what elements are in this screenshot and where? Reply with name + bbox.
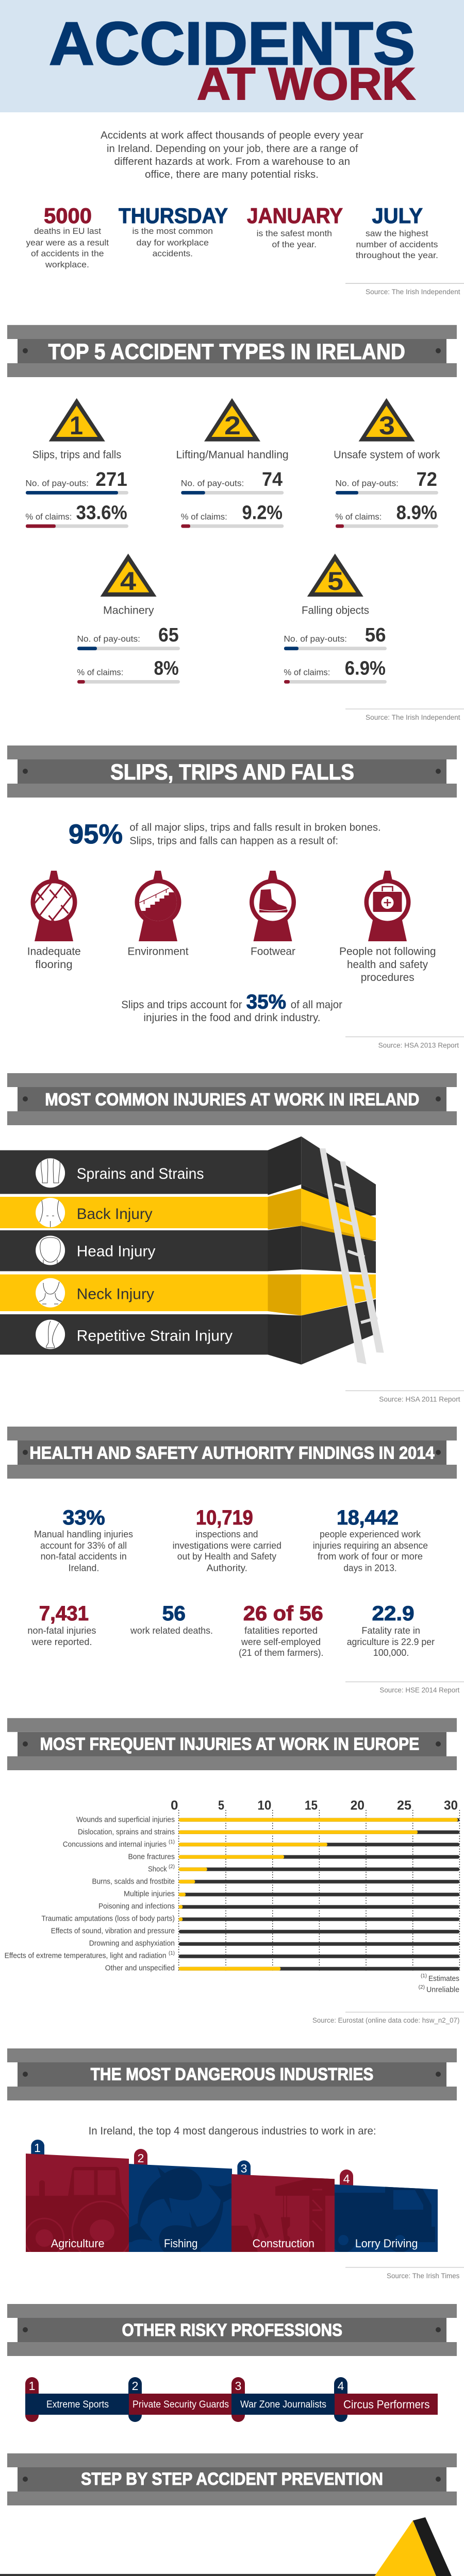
injury: head: [36, 1235, 155, 1265]
finding: 22.9: 22.9: [372, 1602, 415, 1625]
intro text: [101, 129, 363, 180]
profession 3: War Zone Journalists: [240, 2399, 326, 2410]
accident type 5: 6.9%: [345, 658, 386, 680]
chart legend: (2): [419, 1985, 425, 1990]
banner: most dangerous industries: [7, 2048, 457, 2100]
accident type 4: 8%: [154, 658, 179, 680]
accident type 5: 56: [365, 624, 386, 646]
block stack graphic with ladder: [0, 1137, 384, 1365]
chart row labels: Bone fractures: [128, 1853, 175, 1861]
stat: january: JANUARY: [247, 204, 343, 228]
chart row labels: Shock: [148, 1866, 167, 1874]
industry 4: lorry driving: Lorry Driving: [355, 2237, 418, 2250]
cause labels: [27, 946, 436, 984]
profession 1: [25, 2377, 129, 2422]
accident type 4: 4: [120, 567, 136, 596]
finding: 33 percent: non-fatal accidents in: [41, 1551, 127, 1562]
finding: 56: work related deaths.: [130, 1625, 213, 1636]
finding: 10,719: inspections and: [195, 1529, 258, 1539]
icon: fish: [129, 2166, 232, 2259]
banner: slips trips and falls: [7, 745, 457, 798]
industry 2: fishing: Fishing: [164, 2237, 197, 2250]
cause labels: Footwear: [251, 946, 295, 957]
icon: crane and excavator: [231, 2178, 335, 2252]
cause labels: procedures: [361, 972, 415, 984]
accident type 3: No. of pay-outs:: [335, 479, 399, 488]
bar chart: injuries in europe: [5, 1799, 459, 1994]
industries intro: In Ireland, the top 4 most dangerous industries to work in are:: [89, 2125, 376, 2137]
stat: 95 percent: Slips, trips and falls can happen as a result of:: [129, 835, 338, 846]
finding: 10,719: [173, 1506, 281, 1573]
finding: 56: 56: [162, 1602, 186, 1625]
stat: july: JULY: [372, 204, 423, 228]
cause labels: health and safety: [347, 959, 428, 971]
accident type 5: % of claims:: [284, 668, 330, 677]
finding: 22.9: Fatality rate in: [361, 1625, 420, 1636]
industry 2: fishing: 2: [138, 2151, 144, 2165]
stat: january: of the year.: [272, 240, 317, 249]
finding: 26 of 56: [239, 1602, 323, 1658]
chart row labels: [5, 1816, 175, 1973]
stat: 5000 deaths: of accidents in the: [31, 248, 104, 259]
intro text: office, there are many potential risks.: [145, 168, 319, 180]
chart bars: [179, 1818, 459, 1971]
injury: head: Head Injury: [77, 1243, 155, 1260]
industry 2: fishing: [129, 2149, 232, 2259]
chart axis numbers: 15: [305, 1799, 318, 1813]
chart row labels: Wounds and superficial injuries: [76, 1816, 175, 1824]
finding: 56: [130, 1602, 213, 1636]
accident type 2: 74: [262, 469, 283, 490]
industry 3: construction: Construction: [253, 2237, 314, 2250]
banner: step by step: [7, 2453, 457, 2505]
stat: 35 percent: [121, 991, 342, 1024]
banner: most frequent injuries: MOST FREQUENT INJURIES AT WORK IN EUROPE: [40, 1734, 419, 1754]
profession 1: Extreme Sports: [46, 2399, 109, 2410]
finding: 26 of 56: fatalities reported: [244, 1625, 318, 1636]
stat: 95 percent: 95%: [69, 819, 123, 850]
icon: inadequate flooring: [28, 871, 77, 941]
finding: 10,719: 10,719: [196, 1506, 253, 1529]
accident type 1: 1: [70, 411, 83, 440]
injury: sprains and strains: [36, 1158, 204, 1188]
profession 4: Circus Performers: [343, 2398, 430, 2411]
stat: 95 percent: [69, 819, 381, 850]
banner: most dangerous industries: THE MOST DANGEROUS INDUSTRIES: [91, 2065, 373, 2084]
chart legend: Estimates: [428, 1974, 459, 1983]
accident type 3: 8.9%: [396, 502, 437, 524]
injury: neck: [36, 1278, 154, 1308]
chart axis numbers: 10: [257, 1799, 271, 1813]
industry 3: construction: [231, 2160, 335, 2252]
accident type 2: No. of pay-outs:: [181, 479, 244, 488]
icon: first aid box: [364, 871, 410, 941]
source: hsa 2013: Source: HSA 2013 Report: [378, 1042, 459, 1049]
accident type 2: Lifting/Manual handling: [176, 449, 289, 461]
profession 4: [334, 2377, 438, 2422]
finding: 7,431: 7,431: [39, 1602, 89, 1625]
chart axis numbers: 20: [351, 1799, 364, 1813]
source: irish independent: Source: The Irish Independent: [366, 288, 460, 296]
accident type 2: 2: [224, 411, 241, 440]
finding: 26 of 56: (21 of them farmers).: [239, 1648, 323, 1658]
banner: top 5 accident types: TOP 5 ACCIDENT TYPES IN IRELAND: [48, 340, 405, 364]
banner: other risky professions: [7, 2304, 457, 2356]
ladder: [320, 1148, 384, 1364]
source: irish independent 2: Source: The Irish Independent: [366, 714, 460, 721]
profession 4: 4: [338, 2379, 344, 2393]
banner: hsa findings: HEALTH AND SAFETY AUTHORITY FINDINGS IN 2014: [29, 1444, 435, 1463]
chart row labels: Burns, scalds and frostbite: [92, 1878, 175, 1886]
header panel: [0, 0, 464, 112]
accident type 4: Machinery: [103, 605, 154, 616]
stat: july: saw the highest: [366, 229, 428, 238]
accident type 5: 5: [327, 567, 343, 596]
icon: footwear boot: [250, 871, 296, 941]
finding: 33 percent: account for 33% of all: [40, 1540, 127, 1551]
stat: 5000 deaths: 5000: [44, 204, 92, 228]
finding: 26 of 56: 26 of 56: [243, 1602, 323, 1625]
intro text: Accidents at work affect thousands of people every year: [101, 129, 363, 141]
accident type 2: [176, 398, 289, 528]
title: at work: AT WORK: [197, 58, 416, 109]
chart axis numbers: 30: [444, 1799, 458, 1813]
stat: july: [356, 204, 438, 260]
finding: 10,719: out by Health and Safety: [177, 1551, 276, 1562]
chart axis numbers: 25: [397, 1799, 411, 1813]
finding: 18,442: days in 2013.: [343, 1563, 397, 1573]
finding: 7,431: non-fatal injuries: [27, 1625, 96, 1636]
chart row labels: Effects of sound, vibration and pressure: [51, 1927, 175, 1936]
accident type 3: [334, 398, 440, 528]
industry 4: lorry driving: [331, 2170, 438, 2252]
profession 3: 3: [235, 2379, 241, 2393]
industry 1: agriculture: 1: [34, 2141, 41, 2155]
finding: 33 percent: [34, 1506, 133, 1573]
intro text: different hazards at work. From a warehouse to an: [114, 156, 350, 167]
injury: repetitive strain: [36, 1320, 233, 1349]
banner: step by step: STEP BY STEP ACCIDENT PREVENTION: [81, 2469, 383, 2489]
cause labels: People not following: [339, 946, 436, 957]
accident type 1: [25, 398, 128, 528]
stat: 35 percent: Slips and trips account for: [121, 999, 242, 1011]
cause labels: Environment: [127, 946, 189, 957]
icon: tractor: [26, 2167, 129, 2252]
finding: 18,442: people experienced work: [320, 1529, 421, 1539]
profession 1: 1: [29, 2379, 35, 2393]
accident type 3: % of claims:: [335, 512, 382, 521]
accident type 4: [77, 553, 180, 684]
chart row labels: (2): [169, 1864, 175, 1870]
cause labels: Inadequate: [27, 946, 81, 957]
stat: thursday: is the most common: [132, 226, 213, 236]
banner: most common injuries: [7, 1073, 457, 1125]
stat: january: [247, 204, 343, 249]
source: irish times: Source: The Irish Times: [387, 2272, 460, 2280]
finding: 26 of 56: were self-employed: [241, 1637, 321, 1647]
finding: 10,719: investigations were carried: [173, 1540, 281, 1551]
accident type 1: 33.6%: [76, 502, 127, 524]
stat: 5000 deaths: workplace.: [45, 260, 89, 269]
accident type 1: No. of pay-outs:: [25, 479, 89, 488]
stat: thursday: day for workplace: [136, 238, 209, 247]
stat: july: number of accidents: [356, 240, 438, 249]
finding: 18,442: [313, 1506, 428, 1573]
finding: 33 percent: Manual handling injuries: [34, 1529, 133, 1539]
injury: neck: Neck Injury: [77, 1285, 154, 1302]
accident type 3: Unsafe system of work: [334, 449, 440, 461]
industry 4: lorry driving: 4: [343, 2172, 350, 2185]
finding: 10,719: Authority.: [207, 1563, 247, 1573]
stat: 35 percent: injuries in the food and drink industry.: [143, 1012, 321, 1024]
stat: 95 percent: of all major slips, trips and falls result in broken bones.: [129, 822, 381, 834]
profession 2: 2: [132, 2379, 138, 2393]
chart row labels: Poisoning and infections: [98, 1903, 175, 1911]
finding: 18,442: 18,442: [337, 1506, 399, 1529]
stat: july: throughout the year.: [356, 250, 438, 260]
stat: january: is the safest month: [257, 229, 332, 238]
source: eurostat: Source: Eurostat (online data code: hsw_n2_07): [312, 2016, 459, 2024]
banner: slips trips and falls: SLIPS, TRIPS AND FALLS: [110, 760, 354, 785]
banner: top 5 accident types: [7, 325, 457, 377]
chart row labels: (1): [169, 1951, 175, 1956]
chart axis numbers: 0: [171, 1799, 178, 1813]
title: accidents: ACCIDENTS: [49, 10, 415, 78]
chart legend: [419, 1973, 459, 1994]
industry 3: construction: 3: [241, 2162, 247, 2175]
finding: 22.9: [347, 1602, 435, 1658]
chart axis numbers: 5: [218, 1799, 224, 1813]
chart row labels: Concussions and internal injuries: [63, 1841, 167, 1849]
icon: environment stairs: [135, 871, 181, 941]
stat: 35 percent: 35%: [246, 991, 286, 1013]
stat: thursday: THURSDAY: [119, 204, 228, 228]
injury: back: [36, 1198, 153, 1227]
source: hse 2014: Source: HSE 2014 Report: [379, 1686, 460, 1694]
profession 2: [128, 2377, 231, 2422]
banner: hsa findings: [7, 1427, 457, 1479]
chart legend: (1): [421, 1973, 427, 1979]
finding: 33 percent: 33%: [63, 1506, 105, 1529]
banner: other risky professions: OTHER RISKY PROFESSIONS: [122, 2320, 342, 2340]
stat: thursday: [119, 204, 228, 259]
step graphic: arrow and stairs: [0, 2517, 459, 2576]
icon: lorry: [331, 2184, 435, 2252]
injury: repetitive strain: Repetitive Strain Injury: [77, 1328, 233, 1345]
injury: sprains and strains: Sprains and Strains: [77, 1165, 204, 1182]
source: hsa 2011: Source: HSA 2011 Report: [379, 1395, 460, 1403]
accident type 2: 9.2%: [242, 502, 283, 524]
chart row labels: Dislocation, sprains and strains: [78, 1828, 175, 1837]
accident type 1: 271: [95, 469, 127, 490]
accident type 1: % of claims:: [25, 512, 72, 521]
chart row labels: Multiple injuries: [124, 1890, 175, 1899]
finding: 18,442: from work of four or more: [318, 1551, 423, 1562]
chart axis numbers: [171, 1799, 458, 1813]
banner: most common injuries: MOST COMMON INJURIES AT WORK IN IRELAND: [45, 1090, 419, 1110]
accident type 5: Falling objects: [302, 605, 369, 616]
profession 3: [231, 2377, 335, 2422]
accident type 3: 3: [379, 411, 395, 440]
cause labels: flooring: [35, 959, 73, 971]
finding: 33 percent: Ireland.: [69, 1563, 99, 1573]
chart row labels: Other and unspecified: [105, 1964, 175, 1973]
finding: 18,442: injuries requiring an absence: [313, 1540, 428, 1551]
chart row labels: (1): [169, 1839, 175, 1845]
profession 2: Private Security Guards: [132, 2399, 229, 2410]
finding: 7,431: [27, 1602, 96, 1647]
stat: 5000 deaths: deaths in EU last: [34, 226, 101, 236]
accident type 1: Slips, trips and falls: [32, 449, 121, 461]
finding: 7,431: were reported.: [31, 1637, 92, 1647]
banner: most frequent injuries: [7, 1718, 457, 1770]
accident type 4: No. of pay-outs:: [77, 634, 140, 644]
industry 1: agriculture: Agriculture: [51, 2237, 105, 2250]
finding: 22.9: 100,000.: [373, 1648, 409, 1658]
chart row labels: Effects of extreme temperatures, light and radiation: [5, 1952, 167, 1960]
chart row labels: Drowning and asphyxiation: [89, 1940, 175, 1948]
accident type 3: 72: [417, 469, 437, 490]
accident type 2: % of claims:: [181, 512, 227, 521]
stat: 35 percent: of all major: [291, 999, 342, 1011]
chart row labels: Traumatic amputations (loss of body parts): [41, 1915, 175, 1923]
accident type 4: % of claims:: [77, 668, 123, 677]
accident type 5: No. of pay-outs:: [284, 634, 347, 644]
chart legend: Unreliable: [426, 1986, 459, 1994]
accident type 4: 65: [158, 624, 179, 646]
stat: thursday: accidents.: [153, 248, 193, 259]
intro text: in Ireland. Depending on your job, there are a range of: [107, 143, 358, 155]
finding: 22.9: agriculture is 22.9 per: [347, 1637, 435, 1647]
industry 1: agriculture: [26, 2140, 129, 2252]
stat: 5000 deaths: [26, 204, 109, 269]
accident type 5: [284, 553, 387, 684]
stat: 5000 deaths: year were as a result: [26, 238, 109, 247]
injury: back: Back Injury: [77, 1206, 153, 1223]
